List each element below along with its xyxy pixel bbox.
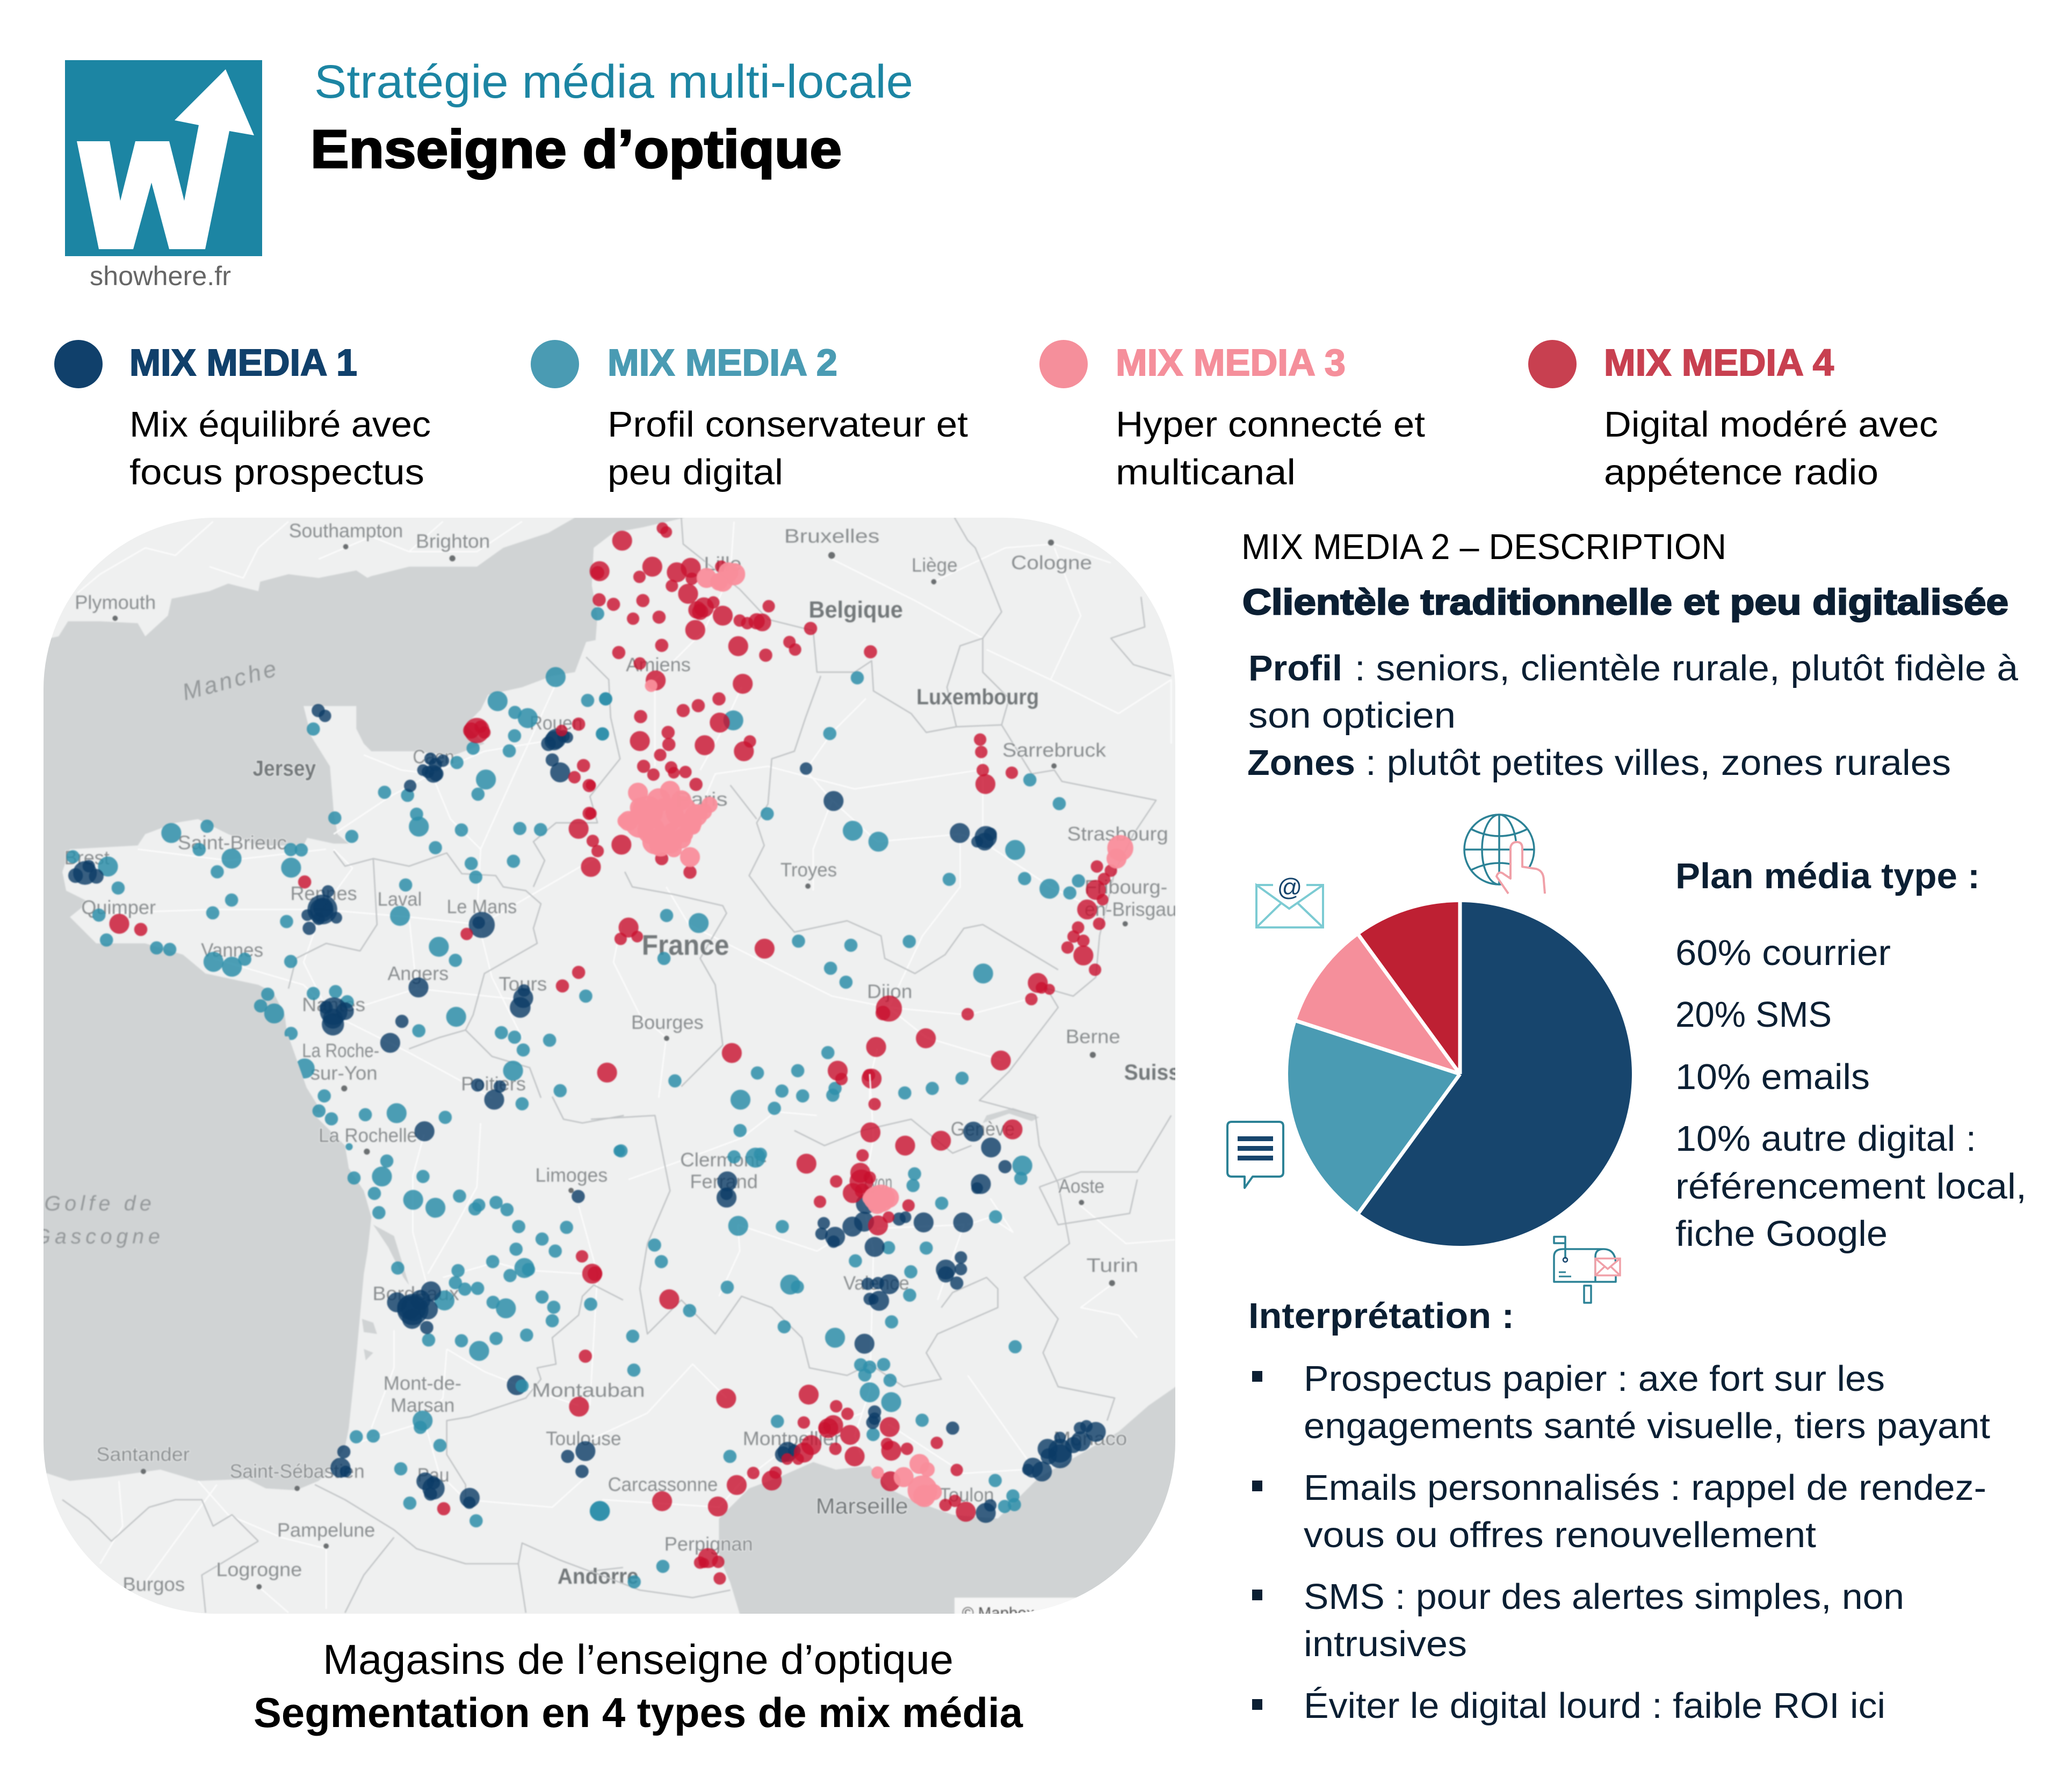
media plan list: fiche Google xyxy=(1675,1214,1888,1254)
icon: email envelope xyxy=(1256,873,1323,927)
map labels north-east: France xyxy=(642,930,729,961)
map quadrant: south-west xyxy=(21,1036,645,1613)
map labels south-west: Saint-Sébastien xyxy=(230,1460,365,1482)
map labels north-west: Plymouth xyxy=(75,591,156,613)
map labels north-east: Strasbourg xyxy=(1067,823,1168,845)
legend: mix media 2: Profil conservateur et xyxy=(608,404,968,445)
map labels north-west xyxy=(64,520,582,1094)
legend: mix media 1: Mix équilibré avec xyxy=(129,404,431,445)
title: brand type: Enseigne d’optique xyxy=(310,119,842,179)
map labels south-west: Golfe de xyxy=(44,1192,154,1215)
map labels south-west: Limoges xyxy=(536,1164,608,1186)
icon: globe with pointing hand xyxy=(1464,815,1545,894)
media plan list: 60% courrier xyxy=(1675,933,1891,973)
map labels south-east: Marseille xyxy=(816,1494,908,1519)
map labels south-west: Mont-de- xyxy=(384,1372,461,1394)
profile and zones text xyxy=(1247,648,2019,783)
map of France with store dots xyxy=(21,518,1194,1639)
logo: showhere W with arrow xyxy=(65,60,262,256)
map labels north-west: Saint-Brieuc xyxy=(178,831,287,853)
map labels south-west: Toulouse xyxy=(546,1427,621,1449)
description heading: MIX MEDIA 2 – DESCRIPTION xyxy=(1241,527,1726,567)
store dots north-east xyxy=(581,523,1133,1109)
map labels north-east: Sarrebruck xyxy=(1002,739,1107,761)
map labels north-west: Rouen xyxy=(530,712,582,734)
media plan list: 20% SMS xyxy=(1675,995,1832,1035)
legend: mix media 1 xyxy=(54,340,431,492)
map labels north-east: Bruxelles xyxy=(784,525,879,547)
map labels north-east xyxy=(626,525,1192,1085)
interpretation heading: Interprétation : xyxy=(1248,1296,1514,1336)
map labels south-east: Turin xyxy=(1086,1254,1138,1276)
interpretation bullet list: SMS : pour des alertes simples, non xyxy=(1304,1577,1904,1617)
map labels north-west: Brighton xyxy=(416,530,490,552)
map labels south-east: Genève xyxy=(951,1118,1015,1140)
icon: email envelope: @ xyxy=(1277,873,1302,901)
profile and zones text: Profil xyxy=(1248,648,1342,688)
map labels south-west: Santander xyxy=(96,1443,190,1465)
map labels south-east: Clermont- xyxy=(680,1149,767,1171)
map labels north-east: Cologne xyxy=(1011,552,1092,574)
legend: mix media 2: MIX MEDIA 2 xyxy=(608,342,837,383)
map labels north-west: Manche xyxy=(179,656,279,706)
profile and zones text: : seniors, clientèle rurale, plutôt fidèle à xyxy=(1355,648,2019,688)
legend: mix media 2: peu digital xyxy=(608,452,783,492)
interpretation bullet list: vous ou offres renouvellement xyxy=(1304,1515,1816,1555)
map labels north-east: Amiens xyxy=(626,654,691,676)
map labels south-east: Carcassonne xyxy=(608,1474,718,1496)
map labels south-west: La Rochelle xyxy=(319,1124,417,1146)
description heading xyxy=(1241,527,2008,622)
map labels north-east: Liège xyxy=(912,554,958,576)
map labels north-east: Dijon xyxy=(867,980,912,1002)
map labels south-east: Ferrand xyxy=(690,1171,758,1193)
map labels north-west: Nantes xyxy=(302,993,365,1015)
map labels south-east: Montpellier xyxy=(743,1427,841,1449)
map labels north-west: Caen xyxy=(413,745,454,767)
map labels south-west: Bordeaux xyxy=(372,1282,459,1304)
map labels north-east: Bourges xyxy=(631,1011,704,1033)
map labels north-east: Suisse xyxy=(1124,1060,1192,1085)
legend: mix media 1: focus prospectus xyxy=(129,452,424,492)
map labels north-west: Brest xyxy=(64,846,110,868)
map quadrant: north-west xyxy=(32,518,685,1113)
map attribution xyxy=(955,1598,1105,1622)
legend: mix media 3 xyxy=(1039,340,1425,492)
map labels north-west: Poitiers xyxy=(461,1072,526,1094)
profile and zones text: Zones xyxy=(1247,743,1355,783)
store dots south-west xyxy=(313,1098,625,1527)
interpretation bullet list: Prospectus papier : axe fort sur les xyxy=(1304,1359,1885,1399)
interpretation bullet list: engagements santé visuelle, tiers payant xyxy=(1304,1406,1990,1446)
map attribution: © Mapbox xyxy=(962,1605,1035,1622)
map labels north-east: Fribourg- xyxy=(1085,876,1167,898)
map labels south-east: Perpignan xyxy=(664,1533,753,1555)
description heading: Clientèle traditionnelle et peu digitalisée xyxy=(1242,582,2008,622)
legend: mix media 3: multicanal xyxy=(1116,452,1296,492)
store dots south-east xyxy=(588,1099,1105,1588)
legend: mix media 1: MIX MEDIA 1 xyxy=(129,342,357,383)
logo caption: showhere.fr xyxy=(90,261,231,291)
map labels north-east: en-Brisgau xyxy=(1085,898,1177,920)
map caption: Magasins de l’enseigne d’optique xyxy=(323,1636,953,1683)
map labels south-west xyxy=(34,1124,645,1595)
map labels south-east: Aoste xyxy=(1059,1175,1104,1197)
legend: mix media 3: MIX MEDIA 3 xyxy=(1116,342,1346,383)
map quadrant: south-east xyxy=(588,1074,1194,1639)
media plan list: Plan média type : xyxy=(1675,856,1980,896)
map labels north-east: Berne xyxy=(1066,1026,1121,1048)
legend: mix media 2 xyxy=(531,340,968,492)
map caption: Segmentation en 4 types de mix média xyxy=(254,1689,1023,1736)
map labels north-west: Le Mans xyxy=(447,896,517,918)
map labels north-west: Angers xyxy=(388,962,449,984)
media plan list: 10% autre digital : xyxy=(1675,1119,1976,1159)
map labels south-west: Logrogne xyxy=(216,1558,302,1580)
map labels south-east: Lyon xyxy=(864,1171,892,1193)
interpretation bullet list: Emails personnalisés : rappel de rendez- xyxy=(1304,1468,1986,1508)
map labels north-west: Jersey xyxy=(252,756,316,781)
map labels south-west: Burgos xyxy=(122,1573,185,1595)
map labels south-east: Valence xyxy=(843,1272,909,1294)
pie chart: media plan xyxy=(1288,900,1632,1246)
map quadrant: north-east xyxy=(581,518,1192,1109)
map labels south-west: Andorre xyxy=(558,1564,639,1588)
map labels north-west: Quimper xyxy=(81,896,156,918)
interpretation bullet list: Éviter le digital lourd : faible ROI ici xyxy=(1304,1686,1885,1726)
map labels north-west: Vannes xyxy=(201,939,263,961)
legend: mix media 4: Digital modéré avec xyxy=(1604,404,1938,445)
legend: mix media 4 xyxy=(1528,340,1938,492)
profile and zones text: : plutôt petites villes, zones rurales xyxy=(1365,743,1951,783)
map labels south-west: Pau xyxy=(417,1464,450,1486)
map labels north-west: La Roche- xyxy=(302,1040,379,1062)
profile and zones text: son opticien xyxy=(1248,695,1456,736)
legend: mix media 3: Hyper connecté et xyxy=(1116,404,1425,445)
media plan list: 10% emails xyxy=(1675,1057,1870,1097)
map labels south-west: Gascogne xyxy=(34,1225,162,1249)
map labels north-west: Southampton xyxy=(289,520,403,542)
media plan list: référencement local, xyxy=(1675,1166,2027,1207)
map labels north-east: Luxembourg xyxy=(916,684,1039,709)
icon: mailbox xyxy=(1554,1237,1620,1303)
map labels north-east: Paris xyxy=(676,788,728,810)
legend: mix media 4: MIX MEDIA 4 xyxy=(1604,342,1834,383)
map labels north-west: sur-Yon xyxy=(310,1062,378,1084)
media plan list xyxy=(1675,856,2027,1254)
map labels south-west: Marsan xyxy=(391,1394,454,1416)
map labels north-west: Tours xyxy=(498,973,547,995)
map labels south-east: Toulon xyxy=(939,1484,994,1506)
interpretation bullet list xyxy=(1252,1359,1990,1726)
map labels north-east: Belgique xyxy=(808,597,903,623)
legend: mix media 4: appétence radio xyxy=(1604,452,1878,492)
interpretation bullet list: intrusives xyxy=(1304,1624,1467,1664)
store dots north-west xyxy=(67,668,612,1109)
title: strategy subtitle: Stratégie média multi-locale xyxy=(314,56,913,108)
map labels south-east: Monaco xyxy=(1053,1427,1127,1449)
icon: SMS speech bubble xyxy=(1227,1122,1283,1188)
map labels south-east xyxy=(608,1118,1138,1555)
map labels north-west: Rennes xyxy=(291,882,357,904)
map labels north-west: Laval xyxy=(378,888,422,910)
map caption xyxy=(254,1636,1023,1736)
map labels north-east: Lille xyxy=(704,553,742,575)
map labels south-west: Pampelune xyxy=(277,1519,375,1541)
map labels north-east: Troyes xyxy=(780,859,837,881)
map labels south-west: Montauban xyxy=(532,1379,645,1401)
